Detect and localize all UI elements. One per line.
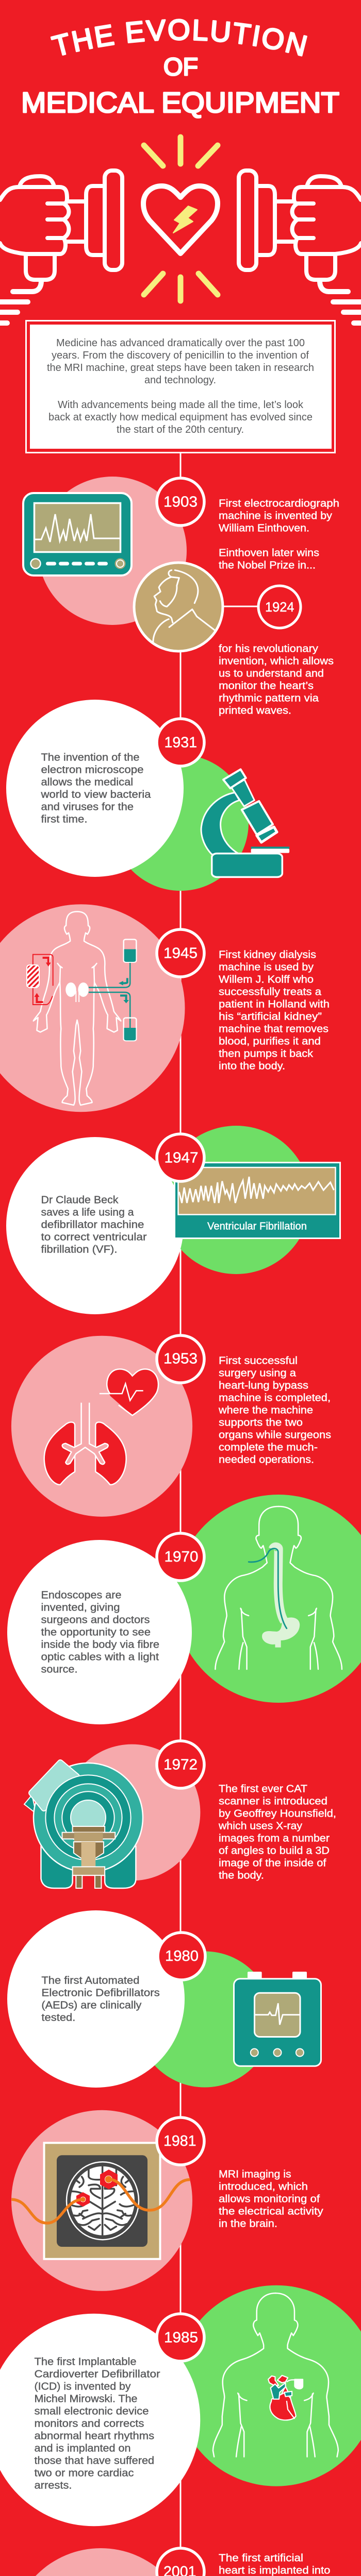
text: 1985: (ICD) is invented by [34,2381,131,2393]
text: 1970: optic cables with a light [41,1652,159,1663]
text: introduction: With advancements being made all the time, let’s look [58,399,304,411]
icon: heart with implanted device [268,2376,303,2420]
text: 1931: electron microscope [41,765,143,776]
text: 1980: The first Automated [41,1975,139,1987]
year: 1981 [157,2117,204,2165]
text: 1945: successfully treats a [219,986,322,997]
text: 1945: patient in Holland with [219,998,330,1010]
text: 1945: machine that removes [219,1023,329,1035]
panel: 2001 artificial heart [10,2548,338,2576]
text: 1985: arrests. [34,2480,72,2492]
text: 1947: saves a life using a [41,1207,134,1218]
text: 1945: into the body. [219,1060,285,1072]
text: 1953: heart-lung bypass [219,1380,308,1391]
text: 1980 [41,1975,160,2024]
year: 1953 [157,1335,204,1383]
title: THE EVOLUTION [51,19,307,57]
year: 1972: 1972 [163,1756,198,1773]
title [21,19,339,118]
icon: ECG monitor [23,493,132,575]
title: OF [163,54,198,81]
year: 1947 [157,1134,204,1181]
text: 1972: by Geoffrey Hounsfield, [219,1808,336,1820]
text: introduction: and technology. [144,375,216,386]
text: 1903: William Einthoven. [219,522,309,534]
text: 1981: allows monitoring of [219,2194,320,2205]
text: introduction [47,337,314,435]
panel: 1985 ICD [0,2285,361,2526]
text: 1947: to correct ventricular [41,1232,147,1243]
text: 1972: The first ever CAT [219,1784,307,1795]
icon: MRI brain scan [44,2143,160,2259]
text: 1947: fibrillation (VF). [41,1244,118,1256]
text: 1931: and viruses for the [41,802,134,813]
text: 1953: needed operations. [219,1454,314,1465]
text: 1953: supports the two [219,1417,303,1428]
text: 1981: MRI imaging is [219,2169,291,2180]
text: 1981 [219,2169,323,2230]
icon: CT scanner [24,1762,143,1888]
text: 1970: the opportunity to see [41,1627,151,1638]
year: 1931 [157,719,204,766]
text: 1972 [218,1784,336,1882]
year: 1981: 1981 [163,2133,196,2149]
chart label: Ventricular Fibrillation [207,1221,307,1232]
text: 1924: for his revolutionary [219,643,318,655]
text: 1945: his “artificial kidney” [219,1011,322,1022]
text: 1985: small electronic device [34,2406,149,2417]
icon: heart with pulse [100,1369,158,1415]
panel: 1980 AED [7,1910,321,2088]
text: 1970 [41,1590,159,1675]
text: 1972: image of the inside of [219,1858,326,1869]
text: 1953: First successful [219,1355,298,1366]
panel: 1931 electron microscope [6,700,289,891]
text: 1980: Electronic Defibrillators [41,1988,160,1999]
text: 1945: First kidney dialysis [219,949,316,960]
text: 1970: Endoscopes are [41,1590,122,1601]
year: 1985: 1985 [164,2330,198,2346]
text: 1931: allows the medical [41,777,133,788]
panel: introduction [26,320,335,452]
text: 1945: blood, purifies it and [219,1036,321,1047]
year: 1945: 1945 [163,945,198,961]
text: 1924: monitor the heart’s [219,681,314,692]
text: 1972: which uses X-ray [218,1821,302,1832]
text: 1981: the electrical activity [219,2206,323,2217]
panel: 1972 CAT scanner [24,1744,336,1888]
text: 1903: the Nobel Prize in... [219,560,316,571]
text: 1953: where the machine [218,1404,313,1416]
text: 1985 [34,2357,160,2492]
year: 2001 [157,2548,204,2576]
text: 1985: two or more cardiac [34,2468,134,2479]
text: 1985: abnormal heart rhythms [34,2431,154,2442]
icon: lungs [44,1403,126,1485]
text: introduction: the MRI machine, great steps have been taken in research [47,362,314,374]
text: 1970: source. [41,1664,77,1675]
year: 1903 [157,478,204,526]
icon: Nobel medal portrait [134,563,223,651]
text: 1924 [219,643,334,717]
panel: 1947 defibrillator [6,1126,340,1314]
text: 1985: The first Implantable [34,2357,136,2368]
text: 1970: surgeons and doctors [41,1615,150,1626]
text: 1981: introduced, which [219,2181,308,2193]
text: 1980: tested. [41,2012,75,2024]
year: 1972 [157,1741,204,1788]
text: 1972: of angles to build a 3D [219,1845,330,1857]
text: 1985: and is implanted on [34,2443,131,2454]
text: 1981: in the brain. [219,2218,277,2230]
text: 1931: world to view bacteria [40,789,151,801]
text: 1985: those that have suffered [34,2455,154,2467]
text: 1945: then pumps it back [219,1048,314,1059]
text: 1931 [40,752,151,825]
text: 1903: First electrocardiograph [219,498,339,509]
panel: 1945 kidney dialysis [0,904,330,1112]
year: 1947: 1947 [164,1150,198,1166]
panel: 1924 Nobel Prize [134,563,334,717]
year: 1924: 1924 [265,599,294,615]
text: 1947: Dr Claude Beck [41,1195,119,1206]
title: MEDICAL EQUIPMENT [21,86,339,118]
icon: orange signal wave [11,2179,190,2223]
panel: 1953 heart-lung bypass [11,1336,331,1517]
text: 1945: Willem J. Kolff who [219,974,314,985]
icon: torso with endoscope [215,1506,342,1669]
text: 2001 [218,2553,338,2576]
icon: AED device [234,1972,321,2066]
text: 1985: Cardioverter Defibrillator [34,2369,160,2380]
text: 1924: printed waves. [219,705,291,717]
text: 1953: surgery using a [219,1367,297,1379]
text: 1953 [218,1355,331,1465]
text: 1972: the body. [219,1870,264,1882]
text: 1903 [219,498,339,571]
text: 1953: machine is completed, [219,1392,331,1403]
icon: defibrillator paddles on heart [0,137,361,323]
text: 2001: The first artificial [219,2553,303,2564]
text: 1970: inside the body via fibre [41,1639,159,1651]
text: 1972: scanner is introduced [219,1796,327,1807]
year: 1903: 1903 [163,494,198,510]
text: 1985: Michel Mirowski. The [34,2394,137,2405]
panel: 1970 endoscope [7,1495,361,1724]
year: 1931: 1931 [164,735,197,751]
text: 1947 [41,1195,147,1256]
text: introduction: back at exactly how medical equipment has evolved since [48,412,313,423]
year: 1985 [157,2314,204,2361]
panel: 1981 MRI [11,2110,323,2291]
text: 1924: rhythmic pattern via [219,693,319,704]
text: 1953: organs while surgeons [219,1429,331,1440]
icon: torso outline [213,2293,338,2457]
icon: right hand with paddle [239,171,361,323]
year: 1970: 1970 [164,1549,198,1565]
icon: left hand with paddle [0,171,122,323]
chart: ventricular fibrillation trace [174,1162,340,1239]
text: 1972: images from a number [219,1833,330,1844]
text: 1924: us to understand and [219,668,324,680]
icon: microscope [201,769,289,877]
year: 1945 [157,929,204,977]
text: 1903: Einthoven later wins [219,547,319,558]
icon: body outline with dialysis circuit [33,911,136,1105]
panel: 1903 electrocardiograph [23,477,339,625]
text: 1947: defibrillator machine [41,1219,144,1231]
text: 1970: invented, giving [41,1602,120,1614]
text: 1980: (AEDs) are clinically [41,2000,141,2011]
year: 1980: 1980 [165,1948,199,1964]
icon: yellow sparks [144,137,218,301]
text: 1931: The invention of the [41,752,139,764]
text: 1903: machine is invented by [219,510,332,521]
text: 1953: complete the much- [219,1442,318,1453]
text: 1985: monitors and corrects [34,2418,144,2430]
year: 1970 [157,1533,204,1581]
text: 1945 [219,949,330,1072]
year: 1953: 1953 [163,1351,198,1367]
text: 1945: machine is used by [219,961,314,973]
icon: striped dialysis filter [26,964,40,988]
text: 1931: first time. [41,814,88,825]
text: introduction: the start of the 20th century. [117,424,244,435]
text: 1924: invention, which allows [219,656,334,667]
year: 1924 [258,586,301,628]
text: introduction: Medicine has advanced dramatically over the past 100 [56,337,305,349]
year: 1980 [158,1933,205,1980]
icon: heart with bolt [143,186,218,253]
text: introduction: years. From the discovery of penicillin to the invention of [52,350,309,361]
